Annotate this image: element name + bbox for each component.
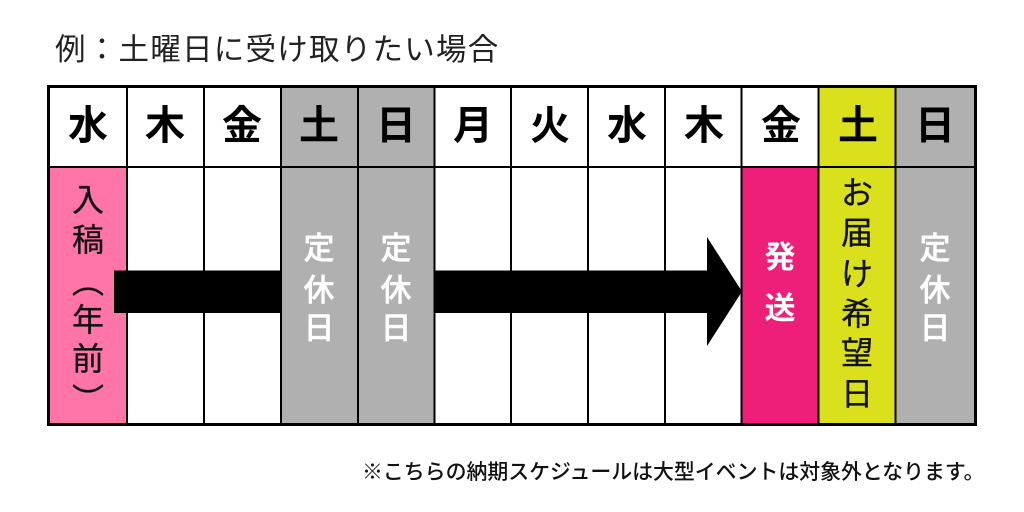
label: intake before noon: 稿: [72, 222, 104, 258]
weekday header row: 火: [530, 104, 570, 148]
label: requested delivery date: 望: [841, 335, 873, 371]
label: closed day 1: 定: [304, 231, 334, 266]
weekday header row: 金: [222, 104, 262, 148]
arrow: production flow to shipping: [114, 237, 742, 346]
weekday header row: 金: [761, 104, 801, 148]
label: requested delivery date: お: [841, 175, 873, 211]
label: shipping: [764, 240, 796, 326]
label: closed day 1: 休: [304, 273, 334, 308]
weekday header row: 土: [838, 104, 878, 148]
table outer border: [48, 86, 976, 424]
cell backgrounds: pink intake column: [49, 168, 127, 424]
label: shipping: 発: [764, 240, 796, 275]
weekday header row: [68, 104, 955, 148]
label: closed day 2: 定: [380, 231, 412, 266]
label: closed day 2: 休: [380, 273, 412, 308]
label: closed day 3: 休: [920, 273, 950, 308]
label: shipping: 送: [764, 291, 796, 326]
label: closed day 3: 定: [920, 231, 950, 266]
weekday header row: 水: [68, 104, 108, 148]
label: intake before noon: ︵: [72, 264, 104, 300]
cell background: shipping day: [742, 168, 818, 424]
label: requested delivery date: 希: [841, 296, 873, 332]
weekday header row: 日: [376, 104, 416, 148]
footnote: ※こちらの納期スケジュールは大型イベントは対象外となります。: [362, 461, 985, 484]
label: intake before noon: [72, 182, 104, 418]
cell background: delivery date: [818, 88, 896, 424]
label: intake before noon: 年: [72, 302, 104, 338]
grid lines: [48, 87, 976, 424]
weekday header row: 日: [915, 104, 955, 148]
weekday header row: 月: [453, 104, 493, 148]
label: intake before noon: 入: [72, 182, 104, 218]
label: closed day 2: [380, 231, 412, 346]
weekday header row: 木: [684, 104, 724, 148]
label: closed day 3: 日: [920, 311, 950, 346]
label: requested delivery date: [841, 175, 873, 412]
weekday header row: 水: [607, 104, 647, 148]
weekday header row: 木: [145, 104, 185, 148]
label: intake before noon: ︶: [72, 382, 104, 418]
label: intake before noon: 前: [72, 341, 104, 377]
schedule table: [48, 86, 976, 425]
label: closed day 2: 日: [380, 311, 412, 346]
label: closed day 1: [304, 231, 334, 346]
label: requested delivery date: 届: [841, 215, 873, 251]
title: 例：土曜日に受け取りたい場合: [55, 33, 500, 67]
cell background: closed final Sunday: [896, 88, 974, 424]
label: requested delivery date: け: [841, 256, 873, 292]
weekday header row: 土: [299, 104, 339, 148]
label: closed day 1: 日: [304, 311, 334, 346]
cell backgrounds: closed Saturday and Sunday: [281, 88, 434, 424]
label: requested delivery date: 日: [841, 376, 873, 412]
label: closed day 3: [920, 231, 950, 346]
